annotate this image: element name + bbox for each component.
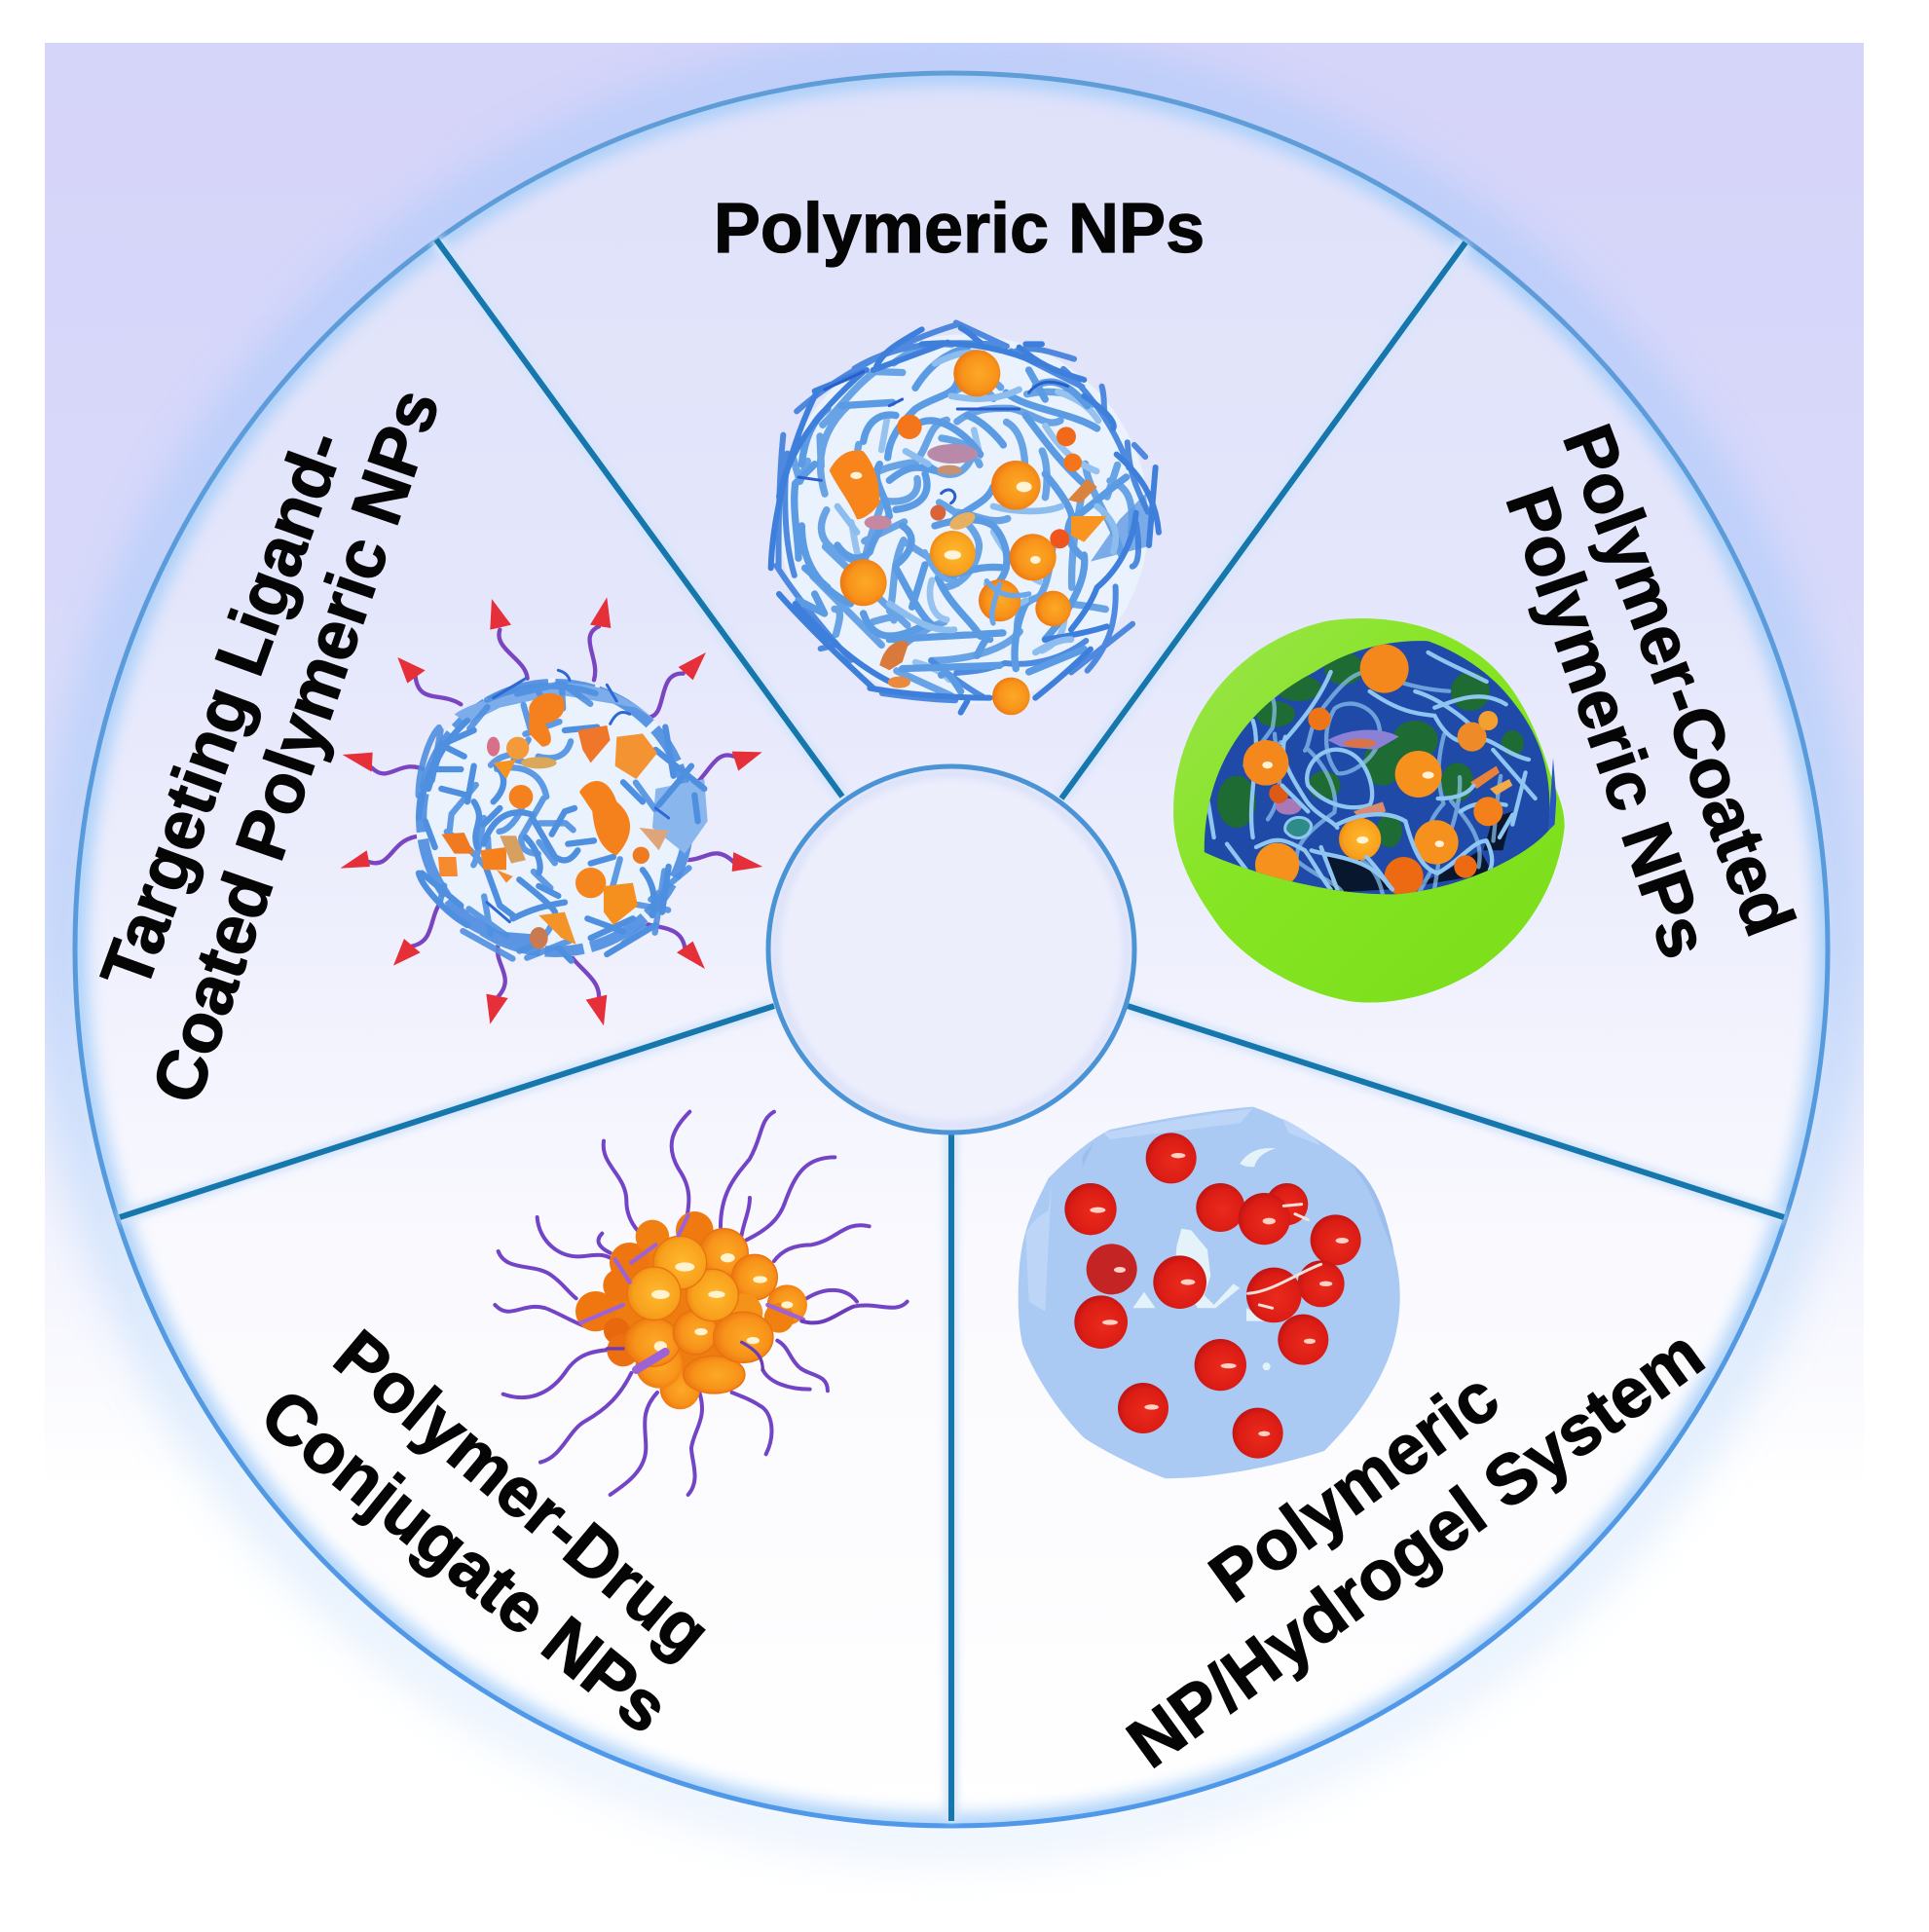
hydrogel blob xyxy=(1019,1107,1400,1478)
ligand stems xyxy=(368,626,733,998)
green shell xyxy=(1173,618,1565,1003)
illustration: polymer-coated nanoparticle xyxy=(1173,618,1565,1003)
illustration: polymeric nanoparticle network xyxy=(691,247,1237,794)
sector divider lines xyxy=(120,240,1784,1821)
heading: Polymeric NPs: Polymeric NPs xyxy=(714,190,1205,268)
ligand arrowheads xyxy=(340,597,762,1025)
chain overlays xyxy=(581,1215,803,1370)
heading: Polymer-Drug Conjugate NPs: Conjugate NPs xyxy=(246,1374,683,1749)
illustration: targeting ligand-coated nanoparticle xyxy=(340,597,762,1025)
heading: Polymeric NP/Hydrogel System: NP/Hydrogel System xyxy=(1114,1315,1718,1783)
network sphere xyxy=(416,679,694,957)
embedded drug spheres xyxy=(830,350,1107,715)
red nanoparticles xyxy=(1064,1133,1361,1459)
heading: Polymer-Drug Conjugate NPs: Polymer-Drug xyxy=(319,1316,724,1673)
heading: Targeting Ligand-Coated Polymeric NPs: Targeting Ligand- xyxy=(87,421,360,999)
orange drug cluster xyxy=(575,1211,807,1409)
embedded drug spheres xyxy=(438,693,669,949)
heading: Targeting Ligand-Coated Polymeric NPs: Coated Polymeric NPs xyxy=(137,380,455,1112)
illustration: polymer-drug conjugate nanoparticle xyxy=(495,1112,908,1495)
heading: Polymeric NP/Hydrogel System: Polymeric xyxy=(1196,1357,1513,1617)
center circle xyxy=(768,766,1134,1133)
heading: Polymer-Coated Polymeric NPs: Polymer-Coated xyxy=(1547,415,1809,946)
polymer chains xyxy=(495,1112,908,1495)
opening with network xyxy=(1204,641,1550,894)
embedded drug spheres xyxy=(1243,645,1502,896)
illustration: polymeric nanoparticle / hydrogel system xyxy=(1019,1107,1400,1478)
heading: Polymer-Coated Polymeric NPs: Polymeric NPs xyxy=(1491,478,1725,968)
